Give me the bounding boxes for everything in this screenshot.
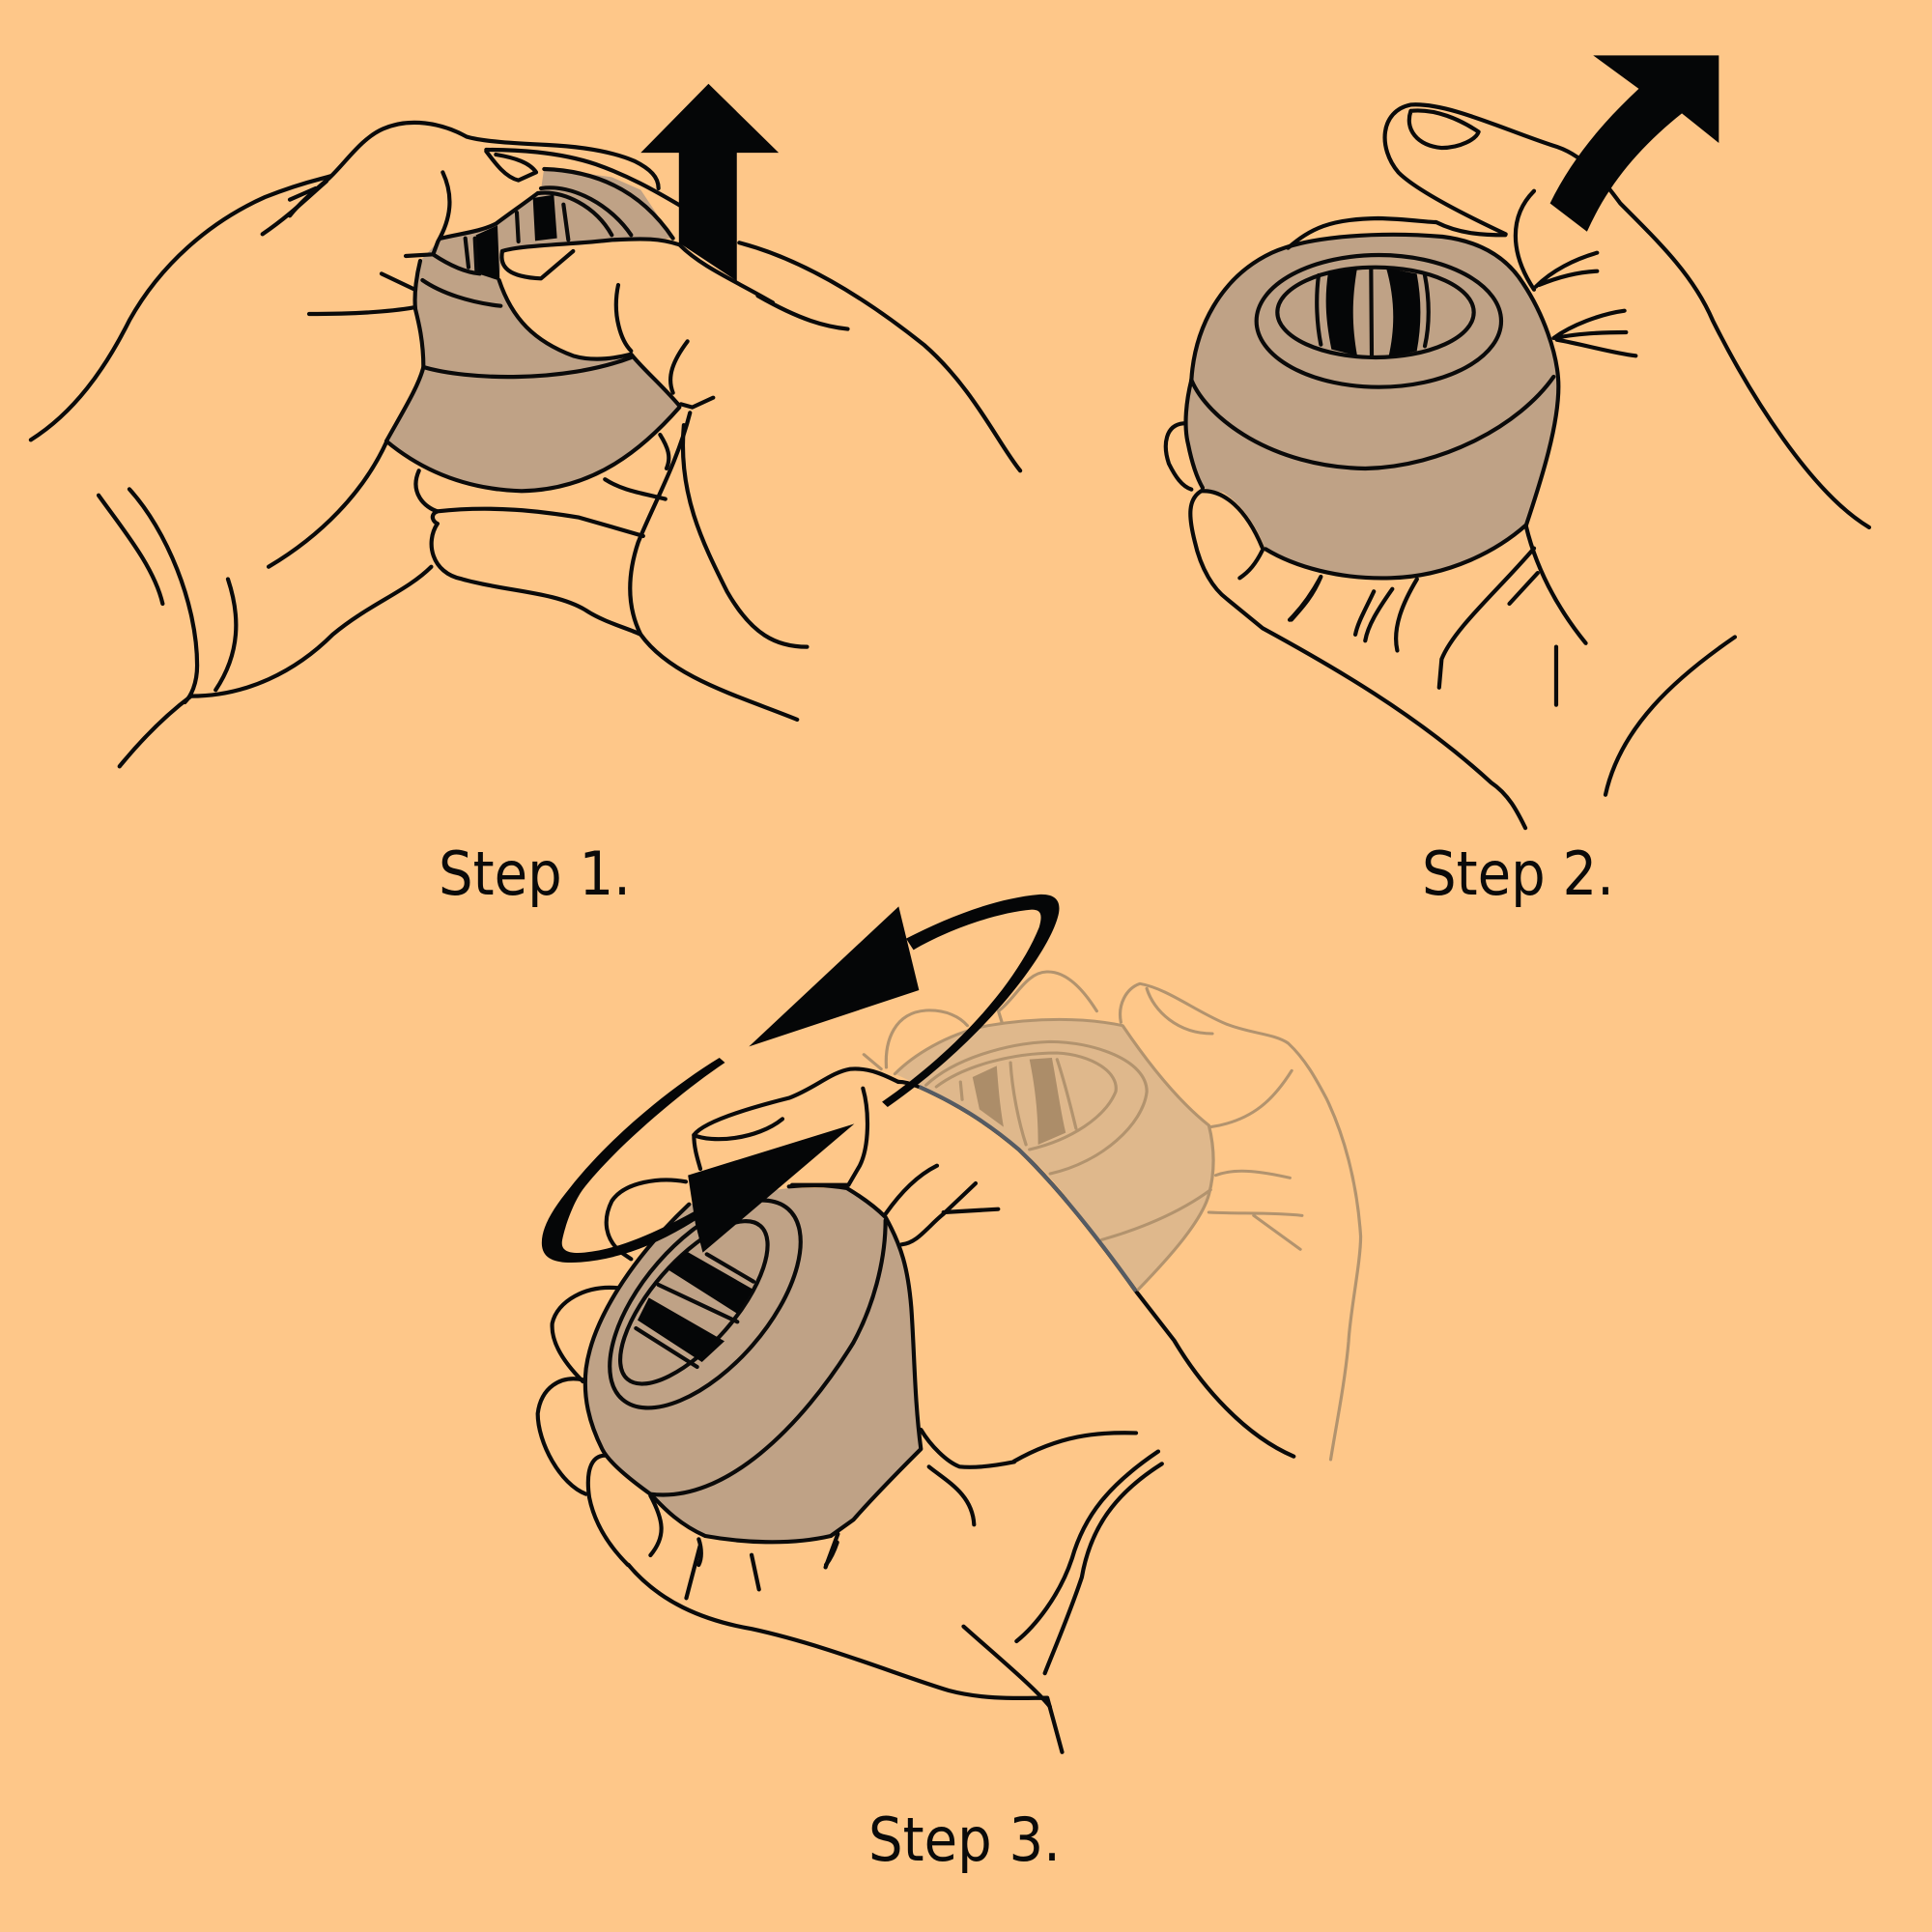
label: step 3: Step 3.: [868, 1804, 1061, 1875]
icon: step 3 arm overlap line: [920, 1087, 1136, 1292]
icon: step 1 hands: [31, 176, 1020, 766]
icon: step 3 ghost hand: [864, 972, 1361, 1460]
icon: step 3 ball: [538, 1068, 1014, 1565]
label: step 1: Step 1.: [439, 838, 631, 909]
icon: step 1 ball: [290, 123, 773, 491]
icon: step 2 hand: [1263, 104, 1869, 828]
panel: step 2 illustration: [1166, 55, 1869, 828]
arrow: step 2 curved arrow: [1550, 55, 1719, 232]
label: step 2: Step 2.: [1422, 838, 1614, 909]
icon: step 3 hand: [629, 1082, 1293, 1752]
arrow: step 3 rotation arrow: [542, 895, 1059, 1263]
panel: step 1 illustration: [31, 84, 1020, 766]
panel: step 3 illustration: [538, 895, 1361, 1752]
arrow: step 1 up arrow: [640, 84, 779, 281]
icon: step 2 ball: [1166, 218, 1635, 628]
